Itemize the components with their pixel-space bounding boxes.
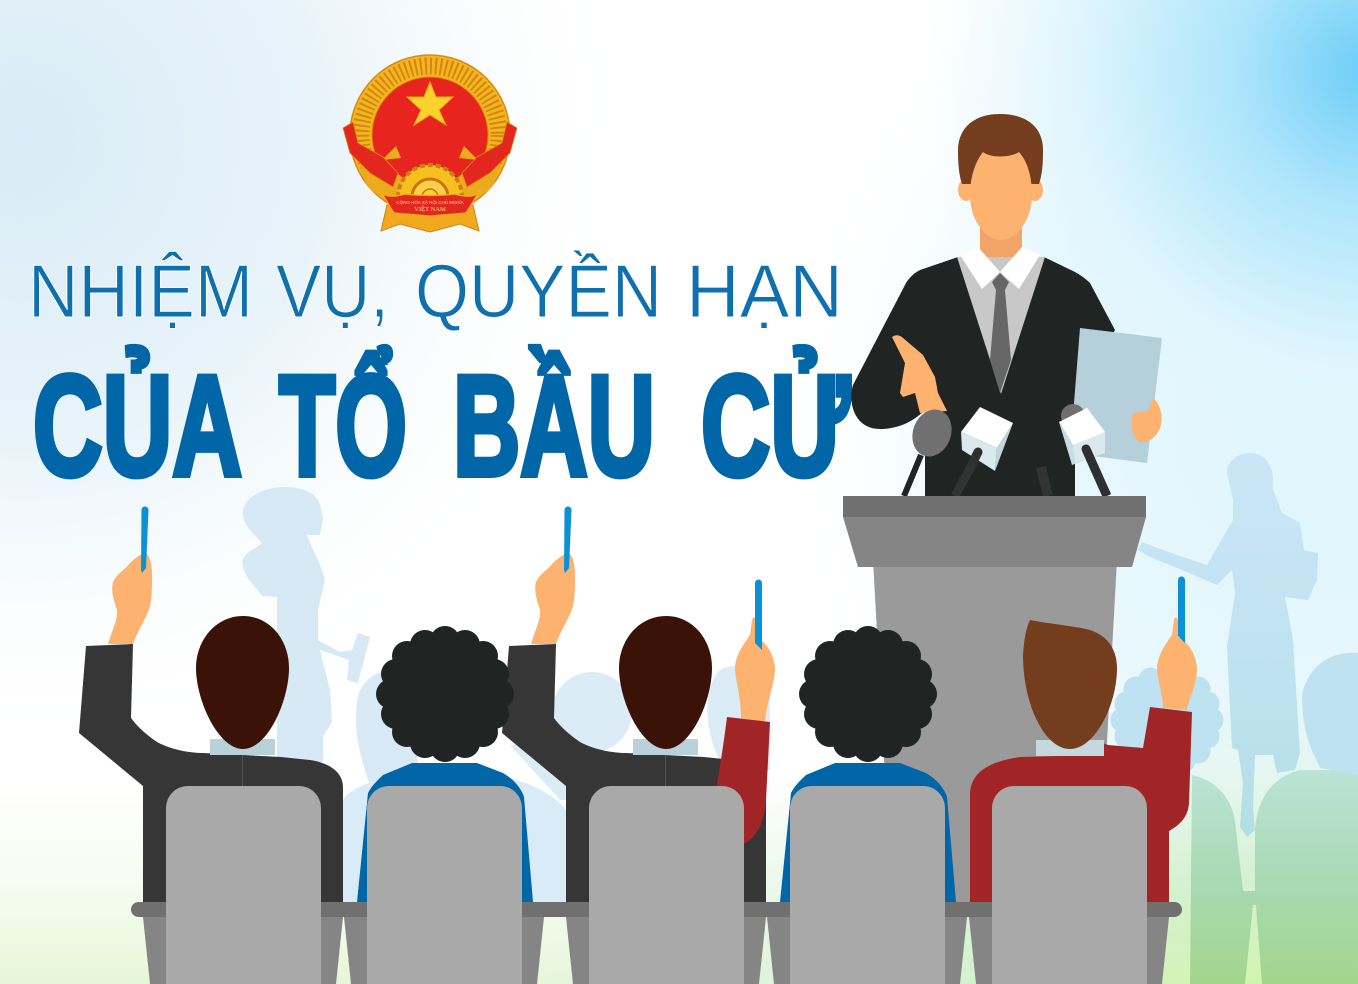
title line 1: QUYỀN [415,249,662,333]
emblem: side ribbons [343,122,398,187]
silhouette: lower ghost bodies, right [1190,770,1358,984]
red man: hair [1023,620,1117,749]
emblem of Vietnam [343,55,517,232]
speaker: document [1070,328,1162,463]
speaker: right hand [1132,398,1162,442]
person 4: raised arm with card [712,580,775,846]
microphones [904,404,1107,496]
emblem: red scroll [380,190,480,216]
audience: man 1 with raised card [79,507,343,903]
chair arm rail [131,902,1182,917]
red man: collar [1036,740,1104,756]
podium [843,517,1146,905]
person 4: hand [735,618,775,722]
row of chairs [143,786,1169,984]
microphone stands [904,449,1107,496]
title line 2: CỦA [33,346,242,506]
speaker: ears [958,179,1043,201]
emblem: scroll text: CỘNG HÒA XÃ HỘI CHỦ NGHĨA [396,199,464,205]
red man: raised hand [1157,618,1197,710]
emblem: golden rice ring [361,66,499,204]
title line 2: BẦU [453,347,655,506]
emblem: base [381,205,479,232]
audience: man in red [970,576,1197,903]
red man: jacket [970,707,1192,903]
speaker [851,114,1162,496]
title line 1 [28,249,843,333]
speaker: shirt [957,257,1045,394]
podium: body [843,517,1146,567]
silhouette: ghost audience head, right [1110,653,1358,776]
speaker: collar [960,247,1040,289]
microphone: white cube right [1059,404,1105,465]
title line 1: VỤ, [276,249,389,333]
speaker: face [970,152,1032,240]
red man: ballot card [1178,576,1185,643]
audience: person 4 with curly hair [780,626,956,902]
title line 2 [33,346,850,506]
emblem of Vietnam: VIỆT NAM [414,205,446,213]
title line 2: TỔ [279,346,407,506]
silhouette: woman with document, right [1138,453,1318,837]
title line 1: NHIỆM [28,249,253,333]
microphone: round grey [906,404,958,462]
audience: person 2 with curly hair [357,626,533,902]
speaker: left hand [892,335,947,413]
person 4: red sleeve [712,717,770,846]
podium: column [873,560,1117,905]
emblem: inner rice sprigs [382,146,478,160]
title line 1: HẠN [686,249,843,333]
silhouette: woman with document, left [242,487,370,762]
speaker: neck [980,228,1022,274]
emblem: rice stalks [360,157,403,203]
podium top [843,496,1146,517]
title line 2: CỬ [701,346,850,506]
microphone: white cube centre [961,407,1013,471]
speaker: tie [990,273,1011,393]
emblem: cogwheel [398,165,462,197]
silhouettes: ghost audience, middle [343,666,770,905]
speaker: suit [851,257,1115,496]
audience: man 3 with raised card [502,507,766,903]
emblem: gold star [407,82,453,125]
person 4: ballot card [755,580,762,650]
speaker: hair [958,114,1043,184]
